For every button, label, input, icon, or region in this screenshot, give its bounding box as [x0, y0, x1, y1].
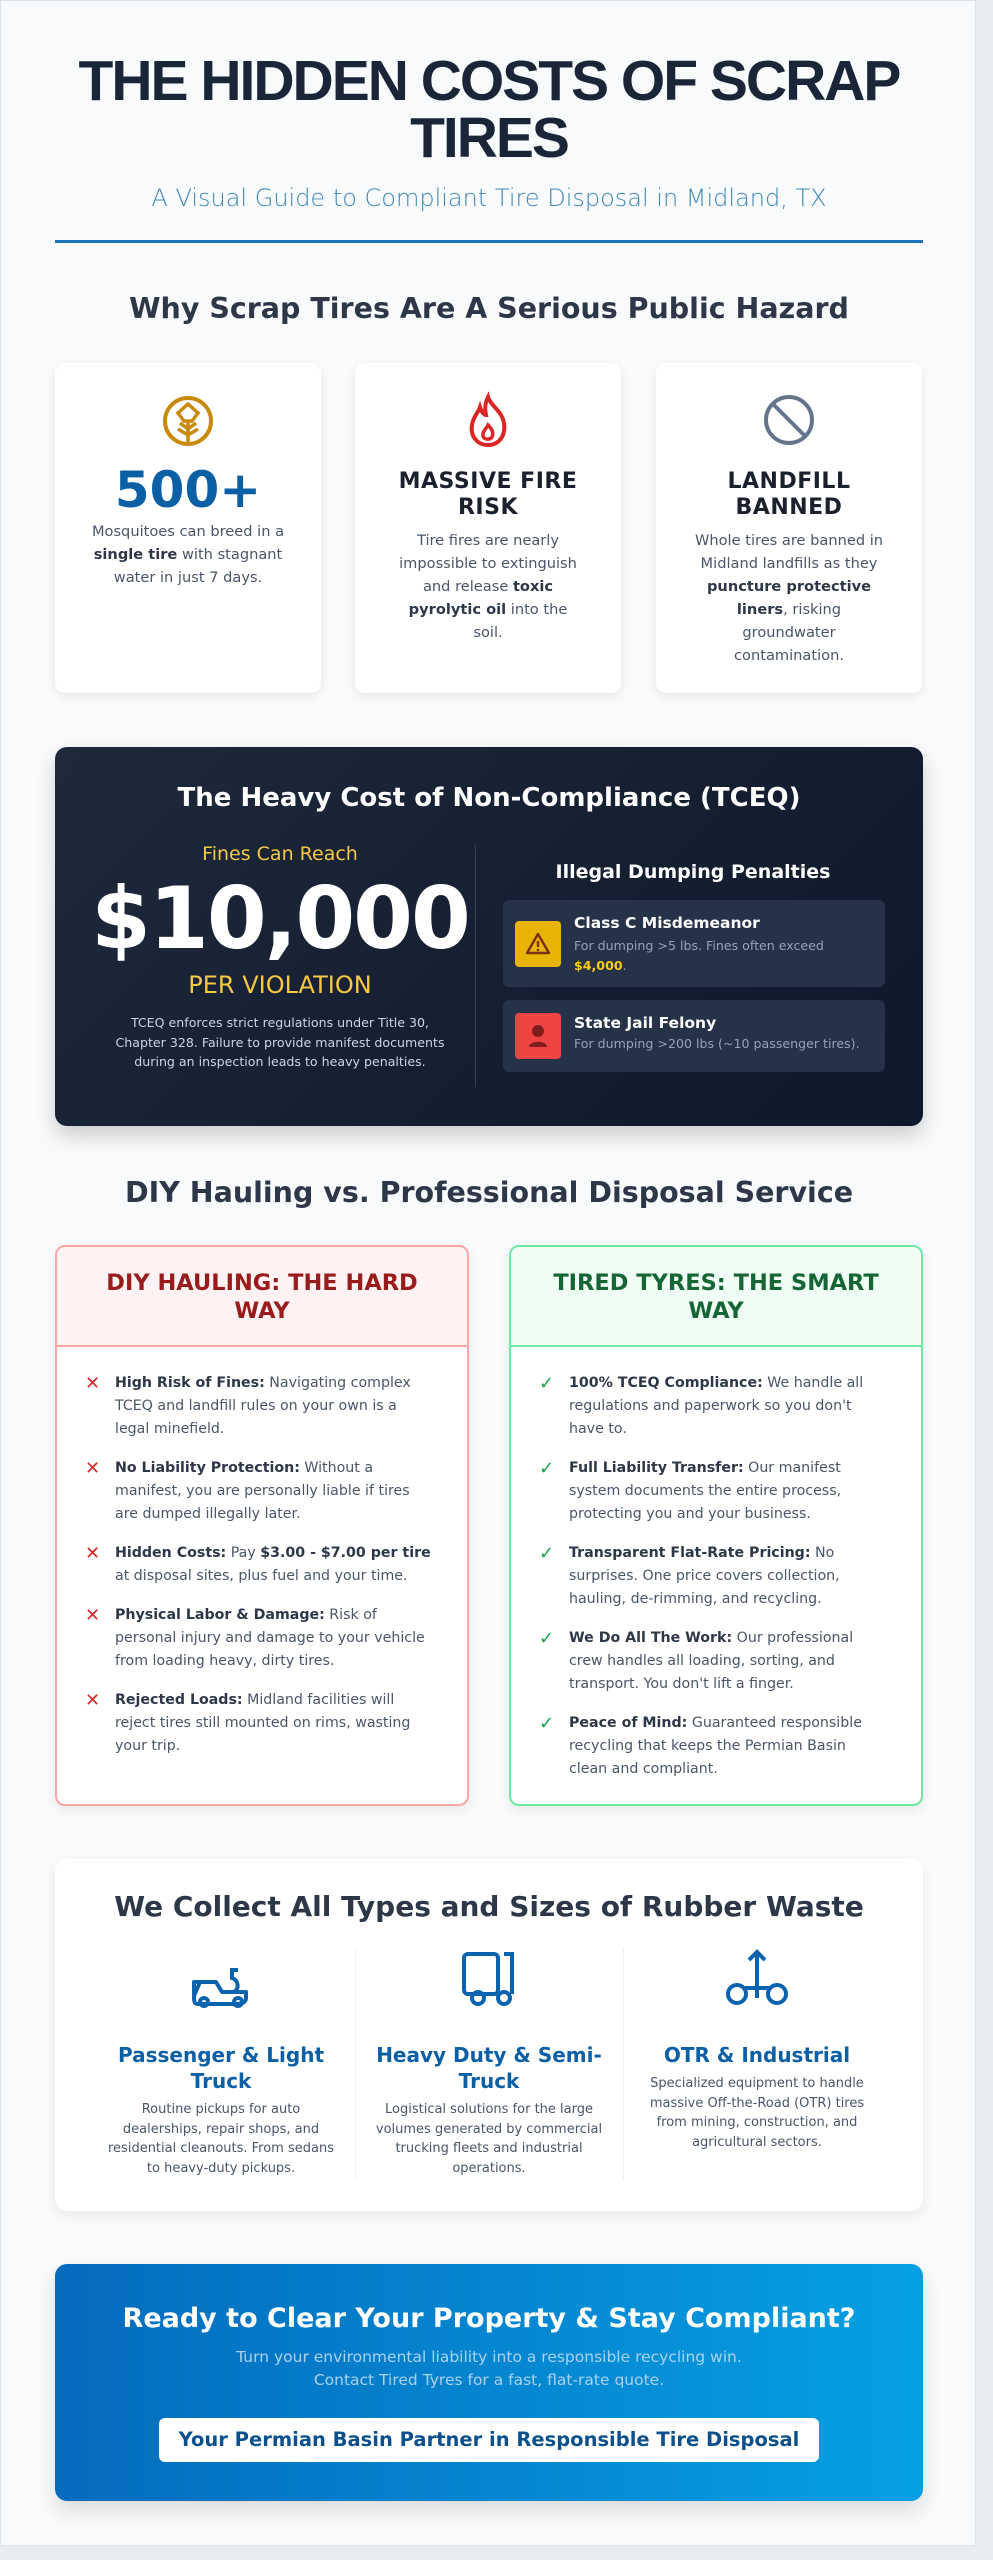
panel: DIY: Hidden Costs: Pay $3.00 - $7.00 per tire	[115, 1545, 431, 1561]
heading: hazards: Why Scrap Tires Are A Serious Public Hazard	[129, 292, 849, 325]
button	[159, 2418, 819, 2462]
header: smart way	[511, 1247, 921, 1347]
CTA text: Contact Tired Tyres for a fast, flat-rate quote.	[314, 2371, 664, 2389]
panel: Tired Tyres: ✓	[539, 1628, 554, 1649]
card: fire risk: Tire fires are nearly impossible to extinguish and release toxic	[399, 532, 577, 595]
column: passenger: Truck	[191, 2069, 251, 2093]
column: heavy duty: Heavy Duty & Semi-	[376, 2043, 602, 2067]
icon: light truck	[192, 1968, 248, 2008]
panel: Tired Tyres: We Do All The Work: Our professional crew handles all loading, sorting, and transport. You don't lift a finger.	[569, 1630, 853, 1692]
panel: non-compliance	[55, 747, 923, 1126]
heading: penalties: Illegal Dumping Penalties	[556, 861, 830, 883]
column: heavy duty	[376, 1952, 602, 2176]
header: smart way: WAY	[688, 1298, 744, 1324]
card: landfill banned: Whole tires are banned in Midland landfills as they puncture protective liners, risking groundwater contamination.	[695, 532, 883, 664]
subtitle: A Visual Guide to Compliant Tire Disposal in Midland, TX	[151, 184, 827, 212]
panel: Tired Tyres: Transparent Flat-Rate Pricing: No surprises. One price covers collection, hauling, de-rimming, and recycling.	[569, 1545, 840, 1607]
CTA text	[236, 2348, 742, 2389]
panel: DIY: No Liability Protection: Without a manifest, you are personally liable if tires are dumped illegally later.	[115, 1460, 410, 1522]
header: DIY: WAY	[234, 1298, 290, 1324]
panel: Tired Tyres	[509, 1245, 923, 1806]
card: mosquitoes: 500+	[115, 461, 261, 519]
card: fire risk: MASSIVE FIRE	[399, 469, 577, 494]
penalty: felony: State Jail Felony	[574, 1014, 716, 1032]
heading: collect: We Collect All Types and Sizes of Rubber Waste	[114, 1890, 864, 1923]
icon: banned	[764, 395, 814, 445]
button: Your Permian Basin Partner in Responsible Tire Disposal	[179, 2428, 799, 2451]
panel: DIY: ✕	[85, 1690, 100, 1711]
panel: DIY: Physical Labor & Damage: Risk of personal injury and damage to your vehicle from loading heavy, dirty tires.	[115, 1607, 425, 1669]
column: OTR: Specialized equipment to handle massive Off-the-Road (OTR) tires from mining, construction, and agricultural sectors.	[650, 2076, 864, 2150]
card: fire risk: pyrolytic oil into the	[409, 601, 567, 618]
card: fire risk: RISK	[458, 495, 518, 520]
fine stat: $10,000	[91, 869, 469, 969]
fine stat: PER VIOLATION	[188, 971, 372, 999]
penalty: felony	[503, 1000, 885, 1072]
card: fire risk	[355, 363, 621, 693]
card: landfill banned	[656, 363, 922, 693]
icon: person	[515, 1013, 561, 1059]
panel: Tired Tyres: 100% TCEQ Compliance: We handle all regulations and paperwork so you don't have to.	[569, 1375, 863, 1437]
panel: DIY: ✕	[85, 1543, 100, 1564]
panel: Tired Tyres: Peace of Mind: Guaranteed responsible recycling that keeps the Permian Basin clean and compliant.	[569, 1715, 862, 1777]
panel: DIY: at disposal sites, plus fuel and your time.	[115, 1568, 408, 1584]
panel: DIY	[55, 1245, 469, 1806]
column: heavy duty: Truck	[459, 2069, 519, 2093]
column: passenger: Passenger & Light	[118, 2043, 324, 2067]
panel: DIY: High Risk of Fines: Navigating complex TCEQ and landfill rules on your own is a legal minefield.	[115, 1375, 411, 1437]
panel: Tired Tyres: ✓	[539, 1458, 554, 1479]
card: landfill banned: LANDFILL	[728, 469, 850, 494]
icon: mosquito	[163, 396, 213, 446]
heading: TCEQ: The Heavy Cost of Non-Compliance (TCEQ)	[178, 783, 800, 813]
card: fire risk: soil.	[473, 624, 503, 641]
header: smart way: TIRED TYRES: THE SMART	[553, 1270, 879, 1296]
fine stat: Fines Can Reach	[202, 843, 358, 865]
title: THE HIDDEN COSTS OF SCRAP TIRES	[79, 49, 899, 170]
panel: DIY: ✕	[85, 1458, 100, 1479]
column: passenger	[108, 1968, 334, 2176]
heading: CTA: Ready to Clear Your Property & Stay Compliant?	[123, 2303, 855, 2334]
icon: warning	[515, 921, 561, 967]
heading: comparison: DIY Hauling vs. Professional Disposal Service	[125, 1176, 853, 1209]
panel: DIY: ✕	[85, 1373, 100, 1394]
penalty: class C	[503, 900, 885, 987]
card: mosquitoes	[55, 363, 321, 693]
panel: DIY: ✕	[85, 1605, 100, 1626]
panel: Tired Tyres: ✓	[539, 1543, 554, 1564]
icon: flame	[470, 391, 506, 447]
penalty: felony: For dumping >200 lbs (~10 passenger tires).	[574, 1036, 860, 1051]
fine stat	[91, 843, 469, 1069]
column: OTR	[650, 1949, 864, 2150]
CTA text: Turn your environmental liability into a responsible recycling win.	[236, 2348, 742, 2366]
penalty: class C: For dumping >5 lbs. Fines often exceed $4,000.	[574, 938, 824, 973]
fine stat: TCEQ enforces strict regulations under Title 30, Chapter 328. Failure to provide manifest documents during an inspection leads to heavy penalties.	[115, 1015, 445, 1069]
icon: industrial	[726, 1949, 788, 2005]
panel: Tired Tyres: ✓	[539, 1713, 554, 1734]
panel: Tired Tyres: ✓	[539, 1373, 554, 1394]
panel: collection types	[55, 1859, 923, 2211]
header: DIY	[57, 1247, 467, 1347]
column: OTR: OTR & Industrial	[664, 2043, 850, 2067]
panel: call to action	[55, 2264, 923, 2501]
penalty: class C: Class C Misdemeanor	[574, 914, 760, 932]
header: DIY: DIY HAULING: THE HARD	[106, 1270, 418, 1296]
panel: DIY: Rejected Loads: Midland facilities will reject tires still mounted on rims, wasting your trip.	[115, 1692, 410, 1754]
card: mosquitoes: Mosquitoes can breed in a single tire with stagnant water in just 7 days.	[92, 523, 284, 586]
column: heavy duty: Logistical solutions for the large volumes generated by commercial trucking fleets and industrial operations.	[376, 2102, 602, 2176]
icon: semi truck	[462, 1952, 514, 2006]
panel: Tired Tyres: Full Liability Transfer: Our manifest system documents the entire process, protecting you and your business.	[569, 1460, 841, 1522]
card: landfill banned: BANNED	[736, 495, 842, 520]
column: passenger: Routine pickups for auto dealerships, repair shops, and residential cleanouts. From sedans to heavy-duty pickups.	[108, 2102, 334, 2176]
